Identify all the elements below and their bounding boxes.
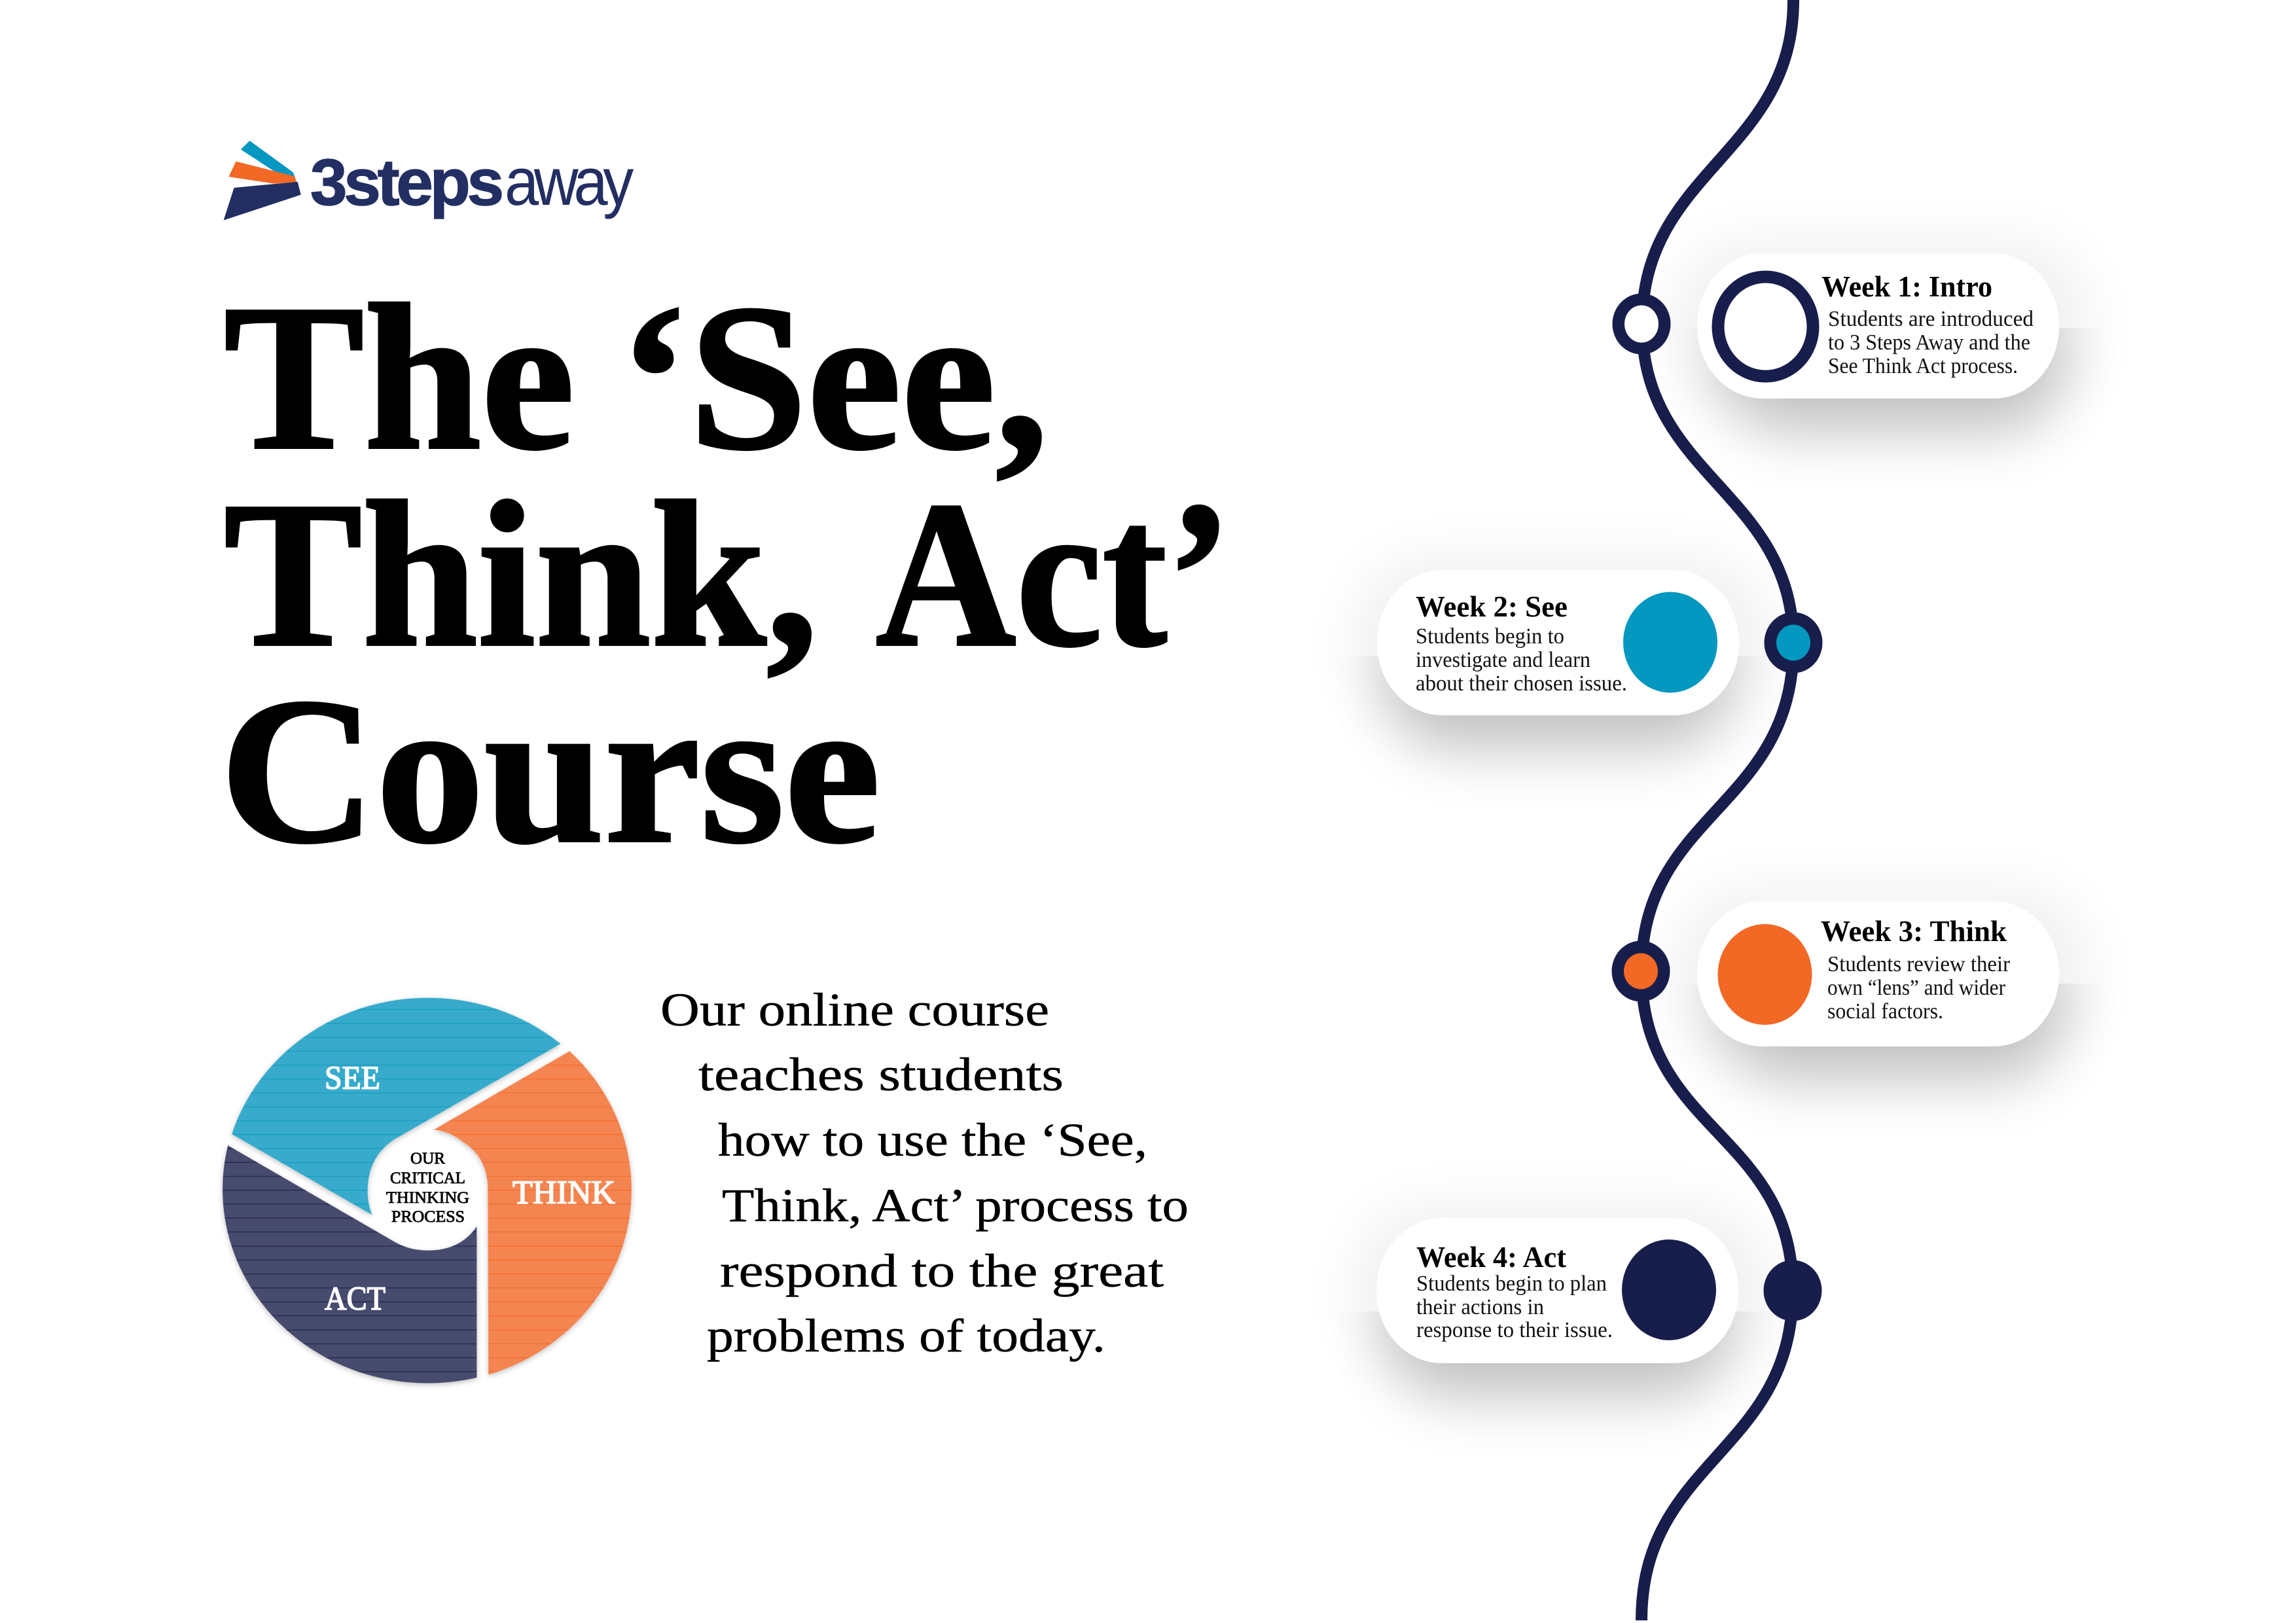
intro paragraph: Think, Act’ process to [722, 1179, 1189, 1232]
segment: see [230, 997, 562, 1217]
week 1 text: Students are introduced [1828, 307, 2034, 331]
pie labels [325, 1060, 615, 1317]
intro paragraph: teaches students [698, 1048, 1064, 1101]
week 1 text: to 3 Steps Away and the [1828, 330, 2030, 355]
week 4 text: response to their issue. [1416, 1318, 1613, 1342]
week 1 text [1828, 307, 2034, 378]
week 3 text: social factors. [1827, 999, 1943, 1024]
week 3 text: Students review their [1827, 952, 2011, 976]
icon: logo fan mark [224, 141, 300, 220]
card: week 2 see [1377, 570, 1739, 715]
intro paragraph: problems of today. [707, 1310, 1105, 1362]
pie centre label: CRITICAL [390, 1169, 465, 1187]
timeline spine [1641, 0, 1793, 1620]
intro paragraph [660, 984, 1189, 1362]
timeline node: week 3 [1611, 941, 1670, 1001]
title: The [224, 262, 575, 493]
week 3 text: own “lens” and wider [1827, 976, 2006, 1000]
card: week 1 intro [1697, 253, 2059, 399]
intro paragraph: how to use the ‘See, [718, 1114, 1147, 1166]
title: Act’ [876, 459, 1232, 690]
week 1 text: See Think Act process. [1828, 354, 2018, 378]
title: Think, [224, 459, 818, 690]
pie centre label: THINKING [386, 1189, 469, 1207]
card: week 3 think [1697, 901, 2059, 1046]
title: Course [220, 656, 880, 887]
logo: 3stepsaway [224, 141, 634, 220]
logo wordmark: 3steps [310, 146, 501, 219]
icon: blue dot [1623, 592, 1717, 692]
timeline node: week 1 [1613, 293, 1670, 355]
pie labels: THINK [512, 1175, 615, 1211]
week 3 text [1827, 952, 2011, 1024]
pie segments [220, 997, 635, 1387]
timeline node: week 4 [1763, 1260, 1822, 1321]
title: ‘See, [619, 262, 1049, 493]
segment: think [433, 1051, 635, 1378]
intro paragraph: Our online course [660, 984, 1049, 1036]
icon: navy dot [1622, 1240, 1716, 1340]
week 2 text: about their chosen issue. [1416, 671, 1627, 696]
week 4 text: Students begin to plan [1416, 1272, 1607, 1296]
pie centre label: PROCESS [391, 1208, 465, 1226]
card shadows [1355, 242, 2088, 1399]
icon: ring [1718, 277, 1813, 376]
week 4 text [1416, 1272, 1613, 1342]
title [220, 262, 1232, 887]
week 4 text: their actions in [1416, 1295, 1544, 1319]
week 2 text [1416, 624, 1627, 696]
icon: orange dot [1717, 924, 1812, 1025]
segment: act [220, 1145, 480, 1387]
logo wordmark [310, 144, 634, 219]
intro paragraph: respond to the great [720, 1245, 1164, 1297]
week 1 heading: Week 1: Intro [1821, 270, 1992, 303]
week 2 text: investigate and learn [1416, 648, 1590, 672]
pie labels: ACT [325, 1281, 386, 1317]
pie labels: SEE [325, 1060, 380, 1097]
card: week 4 act [1376, 1218, 1738, 1363]
week 2 text: Students begin to [1416, 624, 1564, 649]
week 4 heading: Week 4: Act [1416, 1241, 1566, 1274]
week 3 heading: Week 3: Think [1821, 915, 2007, 948]
week 2 heading: Week 2: See [1416, 590, 1568, 623]
pie centre label: OUR [410, 1150, 445, 1168]
logo wordmark: away [505, 144, 634, 219]
timeline node: week 2 [1765, 613, 1822, 673]
pie chart: critical thinking process [220, 997, 635, 1387]
pie centre label [386, 1150, 469, 1226]
